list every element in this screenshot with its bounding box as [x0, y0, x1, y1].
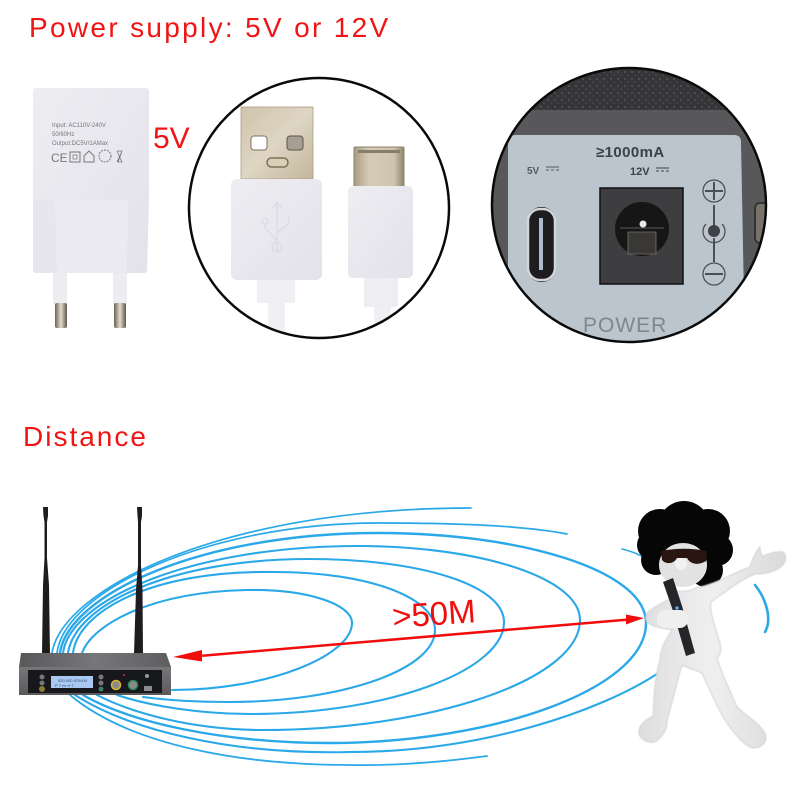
controls: [39, 674, 152, 692]
sunglasses: [661, 549, 707, 564]
head: [659, 543, 707, 587]
circle outline: [492, 68, 766, 342]
chassis: [19, 653, 171, 695]
right side knob: [754, 202, 765, 244]
body: [639, 547, 786, 748]
signal wave ellipses: [52, 508, 768, 765]
hair: [637, 501, 733, 587]
round panel: USB cable: [189, 78, 449, 340]
port labels: 5V: [527, 166, 540, 177]
label: 5V: 5V: [153, 122, 190, 155]
distance label: >50M: [391, 592, 477, 635]
housing: [490, 66, 770, 350]
charger pins: [53, 273, 127, 328]
charger photo: [33, 88, 149, 328]
port labels: [527, 144, 669, 178]
receiver unit: [19, 507, 171, 695]
LCD display: 520.000 670000: [58, 678, 88, 683]
circle outline: [189, 78, 449, 338]
antennas: [42, 507, 143, 654]
LCD display: [51, 676, 93, 688]
POWER label: POWER: [583, 314, 667, 337]
charger label text: Output:DC5V/1AMax: [52, 141, 108, 147]
charger label text: CE: [51, 151, 68, 165]
front panel: [28, 670, 162, 693]
cartoon figure with microphone: [637, 501, 786, 748]
charger label text: 50/60Hz: [52, 132, 74, 138]
mic indicator: [675, 606, 679, 610]
title: power supply: Power supply: 5V or 12V: [29, 12, 391, 43]
nose: [675, 558, 687, 570]
port labels: 12V: [630, 166, 650, 178]
round panel: power ports: [490, 66, 770, 350]
polarity symbol: [703, 180, 725, 285]
label plate: [508, 135, 745, 350]
USB logo: [262, 202, 289, 252]
port labels: ≥1000mA: [596, 144, 665, 161]
USB-C port: [527, 207, 556, 282]
USB-C connector: [348, 147, 413, 335]
USB-A connector: [231, 107, 322, 340]
hand on microphone: [657, 610, 688, 628]
heading: distance: Distance: [23, 421, 148, 452]
LCD display: P 7 ▪▪▪ ▪▪ 7: [55, 683, 74, 688]
charger label text: [51, 123, 122, 165]
distance arrow: [173, 614, 644, 662]
microphone: [663, 578, 695, 656]
DC jack: [600, 188, 683, 284]
charger body: [33, 88, 149, 273]
charger label text: Input: AC110V-240V: [52, 123, 106, 129]
